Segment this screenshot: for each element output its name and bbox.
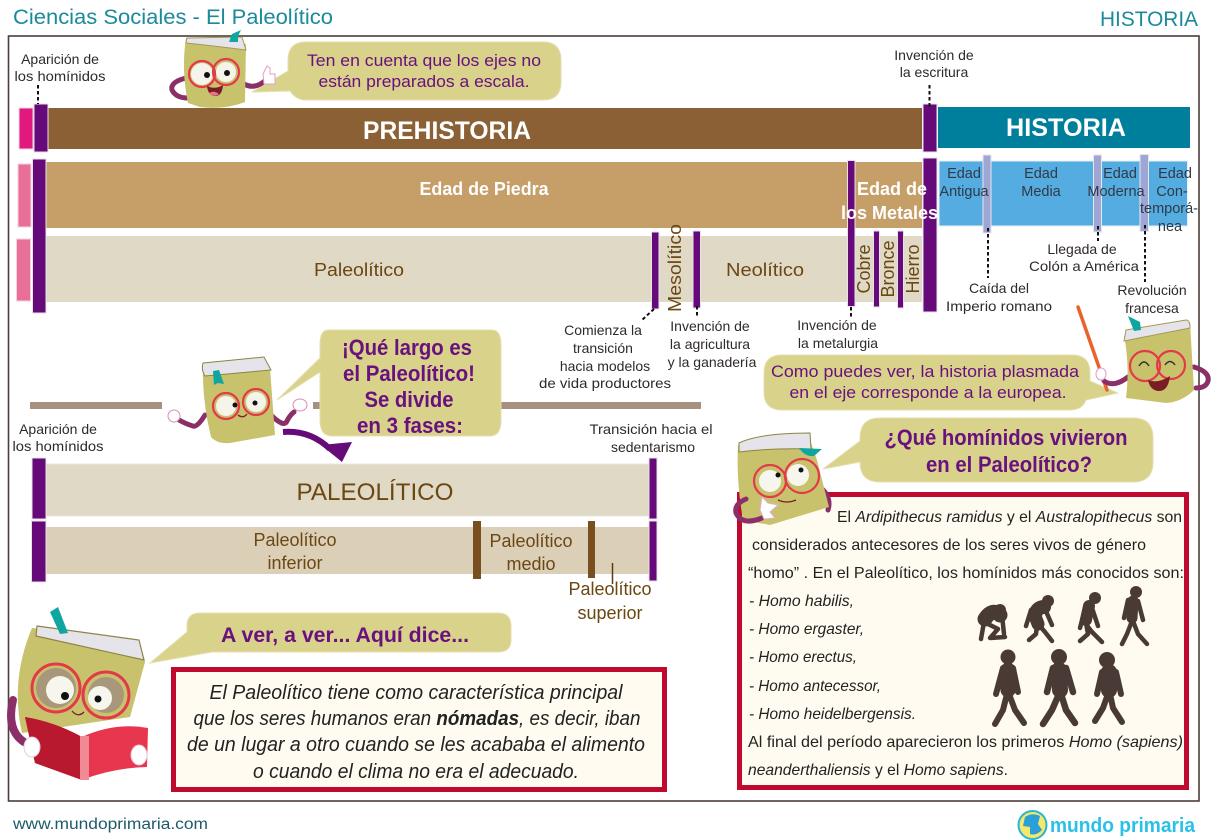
- text box: nómadas: que los seres humanos eran nómadas, es decir, iban: [194, 707, 640, 730]
- annotation: revolución francesa: Revolución: [1117, 282, 1187, 298]
- speech bubble: historia europea: en el eje corresponde a la europea.: [790, 383, 1066, 402]
- annotation: revolución francesa: [1117, 225, 1187, 316]
- text box: homínidos: considerados antecesores de los seres vivos de género: [752, 537, 1146, 554]
- annotation: invención de la escritura: la escritura: [900, 64, 968, 80]
- annotation: transición al sedentarismo: Transición hacia el: [590, 421, 712, 437]
- vertical labels: mesolítico, cobre, bronce, hierro: Mesolítico: [665, 224, 685, 312]
- annotation: revolución francesa: francesa: [1125, 300, 1179, 316]
- annotation: transición a modelos productores: [539, 309, 671, 391]
- speech bubble: a ver, a ver: A ver, a ver... Aquí dice...: [221, 624, 469, 647]
- bar: fases del paleolítico: Paleolítico: [568, 579, 652, 599]
- annotation: aparición de los homínidos: Aparición de: [21, 51, 99, 67]
- speech bubble: qué homínidos: ¿Qué homínidos vivieron: [884, 425, 1128, 450]
- annotation: caída del imperio romano: Caída del: [969, 280, 1029, 296]
- timeline row: prehistoria: PREHISTORIA: [363, 117, 531, 145]
- text box: nómadas: o cuando el clima no era el adecuado.: [253, 760, 579, 783]
- timeline row: edades históricas: nea: [1158, 219, 1183, 235]
- character: book with open arms: [168, 357, 307, 443]
- annotation: transición al sedentarismo: [590, 421, 712, 455]
- timeline row: historia: [938, 107, 1190, 148]
- annotation: caída del imperio romano: [946, 228, 1052, 314]
- timeline row: historia: HISTORIA: [1006, 114, 1126, 142]
- purple period markers: [32, 104, 937, 313]
- timeline row: edades históricas: Con-: [1156, 184, 1188, 200]
- arrow: purple curved: [283, 432, 352, 462]
- annotation: invención de la metalurgia: la metalurgia: [798, 335, 878, 351]
- bar: fases del paleolítico: medio: [506, 554, 556, 574]
- timeline row: edades históricas: Edad: [1158, 166, 1192, 182]
- speech bubble: qué homínidos: [823, 418, 1153, 482]
- text box: homínidos: - Homo erectus,: [749, 649, 857, 666]
- speech bubble: escala: están preparados a escala.: [318, 72, 530, 91]
- section divider: brown line: [30, 402, 701, 409]
- bar: fases del paleolítico: superior: [577, 603, 643, 623]
- speech bubble: historia europea: [764, 355, 1118, 410]
- character: book reading: [11, 607, 148, 780]
- annotation: transición a modelos productores: hacia modelos: [560, 358, 650, 374]
- text box: homínidos: - Homo antecessor,: [749, 678, 881, 695]
- text box: homínidos: Al final del período aparecieron los primeros Homo (sapiens): [748, 734, 1183, 751]
- annotation: agricultura y ganadería: Invención de: [670, 318, 750, 334]
- annotation: agricultura y ganadería: la agricultura: [670, 336, 750, 352]
- speech bubble: qué homínidos: en el Paleolítico?: [926, 452, 1092, 477]
- speech bubble: historia europea: Como puedes ver, la historia plasmada: [771, 362, 1080, 381]
- annotation: invención de la escritura: [894, 47, 974, 108]
- character: book with pointer stick: [1078, 307, 1208, 403]
- vertical labels: mesolítico, cobre, bronce, hierro: Bronce: [878, 240, 898, 298]
- bar: fases del paleolítico: Paleolítico: [253, 530, 337, 550]
- text box: homínidos: neanderthaliensis y el Homo sapiens.: [748, 762, 1008, 779]
- annotation: transición a modelos productores: de vida productores: [539, 375, 671, 391]
- text box: nómadas: El Paleolítico tiene como característica principal: [210, 681, 624, 704]
- annotation: llegada de colón: [1029, 226, 1139, 274]
- timeline row: edades históricas: Edad: [947, 166, 981, 182]
- annotation: aparición de los homínidos 2: [12, 421, 103, 454]
- timeline row: edades históricas: Media: [1021, 184, 1062, 200]
- text box: homínidos: “homo” . En el Paleolítico, los homínidos más conocidos son:: [748, 565, 1184, 582]
- timeline row: edad de piedra: Edad de Piedra: [420, 179, 549, 199]
- footer url: www.mundoprimaria.com: [12, 816, 208, 833]
- speech bubble: escala: Ten en cuenta que los ejes no: [307, 51, 541, 70]
- annotation: aparición de los homínidos: [14, 51, 105, 104]
- annotation: transición al sedentarismo: sedentarismo: [611, 439, 695, 455]
- annotation: transición a modelos productores: Comienza la: [564, 322, 642, 338]
- bar: fases del paleolítico: Paleolítico: [489, 531, 573, 551]
- annotation: invención de la metalurgia: [797, 307, 878, 351]
- label: edad de los metales: [841, 179, 938, 223]
- character: book with thumbs up: [172, 30, 275, 108]
- annotation: aparición de los homínidos 2: los homínidos: [12, 438, 103, 454]
- bar: fases del paleolítico: [46, 521, 652, 623]
- annotation: invención de la escritura: Invención de: [894, 47, 974, 63]
- timeline row: edades históricas: Edad: [1024, 166, 1058, 182]
- bar: paleolítico general: [46, 464, 649, 516]
- text box: nómadas: [174, 670, 664, 790]
- timeline row: edad de piedra: [18, 162, 922, 228]
- text box: homínidos: - Homo ergaster,: [749, 621, 864, 638]
- vertical labels: mesolítico, cobre, bronce, hierro: [665, 224, 923, 312]
- text box: homínidos: El Ardipithecus ramidus y el Australopithecus son: [837, 509, 1182, 526]
- text box: homínidos: - Homo habilis,: [749, 593, 854, 610]
- logo: mundo primaria: mundo primaria: [1050, 815, 1196, 837]
- timeline row: edades históricas: Antigua: [939, 184, 990, 200]
- text box: nómadas: de un lugar a otro cuando se les acababa el alimento: [187, 733, 645, 756]
- text box: homínidos: [740, 494, 1186, 788]
- speech bubble: qué largo es: Se divide: [364, 387, 454, 412]
- label: edad de los metales: Edad de: [857, 179, 927, 199]
- icon: hominid silhouettes: [981, 586, 1147, 724]
- timeline row: edades históricas: temporá-: [1140, 201, 1198, 217]
- vertical labels: mesolítico, cobre, bronce, hierro: Cobre: [854, 244, 874, 294]
- timeline row: edades históricas: [939, 154, 1198, 235]
- speech bubble: qué largo es: ¡Qué largo es: [342, 335, 472, 360]
- speech bubble: qué largo es: [277, 330, 501, 438]
- timeline row: prehistoria: [19, 108, 922, 149]
- annotation: llegada de colón: Colón a América: [1029, 258, 1139, 274]
- annotation: llegada de colón: Llegada de: [1047, 241, 1117, 257]
- subject heading: HISTORIA: [1100, 8, 1198, 31]
- timeline row: edades históricas: Edad: [1103, 166, 1137, 182]
- bar: fases del paleolítico: inferior: [267, 553, 323, 573]
- annotation: caída del imperio romano: Imperio romano: [946, 298, 1052, 314]
- logo: mundo primaria: [1018, 811, 1196, 839]
- annotation: agricultura y ganadería: y la ganadería: [668, 354, 757, 370]
- annotation: agricultura y ganadería: [668, 306, 757, 370]
- speech bubble: a ver, a ver: [150, 613, 511, 663]
- speech bubble: qué largo es: en 3 fases:: [357, 413, 463, 438]
- bar: paleolítico general: PALEOLÍTICO: [296, 479, 454, 506]
- timeline row: paleolítico, neolítico: Paleolítico: [314, 260, 404, 280]
- speech bubble: escala: [252, 42, 561, 100]
- annotation: transición a modelos productores: transición: [573, 340, 633, 356]
- annotation: aparición de los homínidos 2: Aparición de: [19, 421, 97, 437]
- purple markers: paleolítico: [32, 458, 657, 582]
- timeline row: paleolítico, neolítico: [16, 236, 922, 302]
- vertical labels: mesolítico, cobre, bronce, hierro: Hierro: [903, 244, 923, 294]
- timeline row: paleolítico, neolítico: Neolítico: [726, 260, 804, 280]
- text box: homínidos: - Homo heidelbergensis.: [749, 706, 916, 723]
- speech bubble: qué largo es: el Paleolítico!: [343, 361, 475, 386]
- label: edad de los metales: los Metales: [841, 203, 938, 223]
- timeline row: edades históricas: Moderna: [1087, 184, 1146, 200]
- character: book thinking: [736, 433, 829, 525]
- title: Ciencias Sociales - El Paleolítico: [13, 6, 333, 29]
- annotation: aparición de los homínidos: los homínidos: [14, 68, 105, 84]
- annotation: invención de la metalurgia: Invención de: [797, 317, 877, 333]
